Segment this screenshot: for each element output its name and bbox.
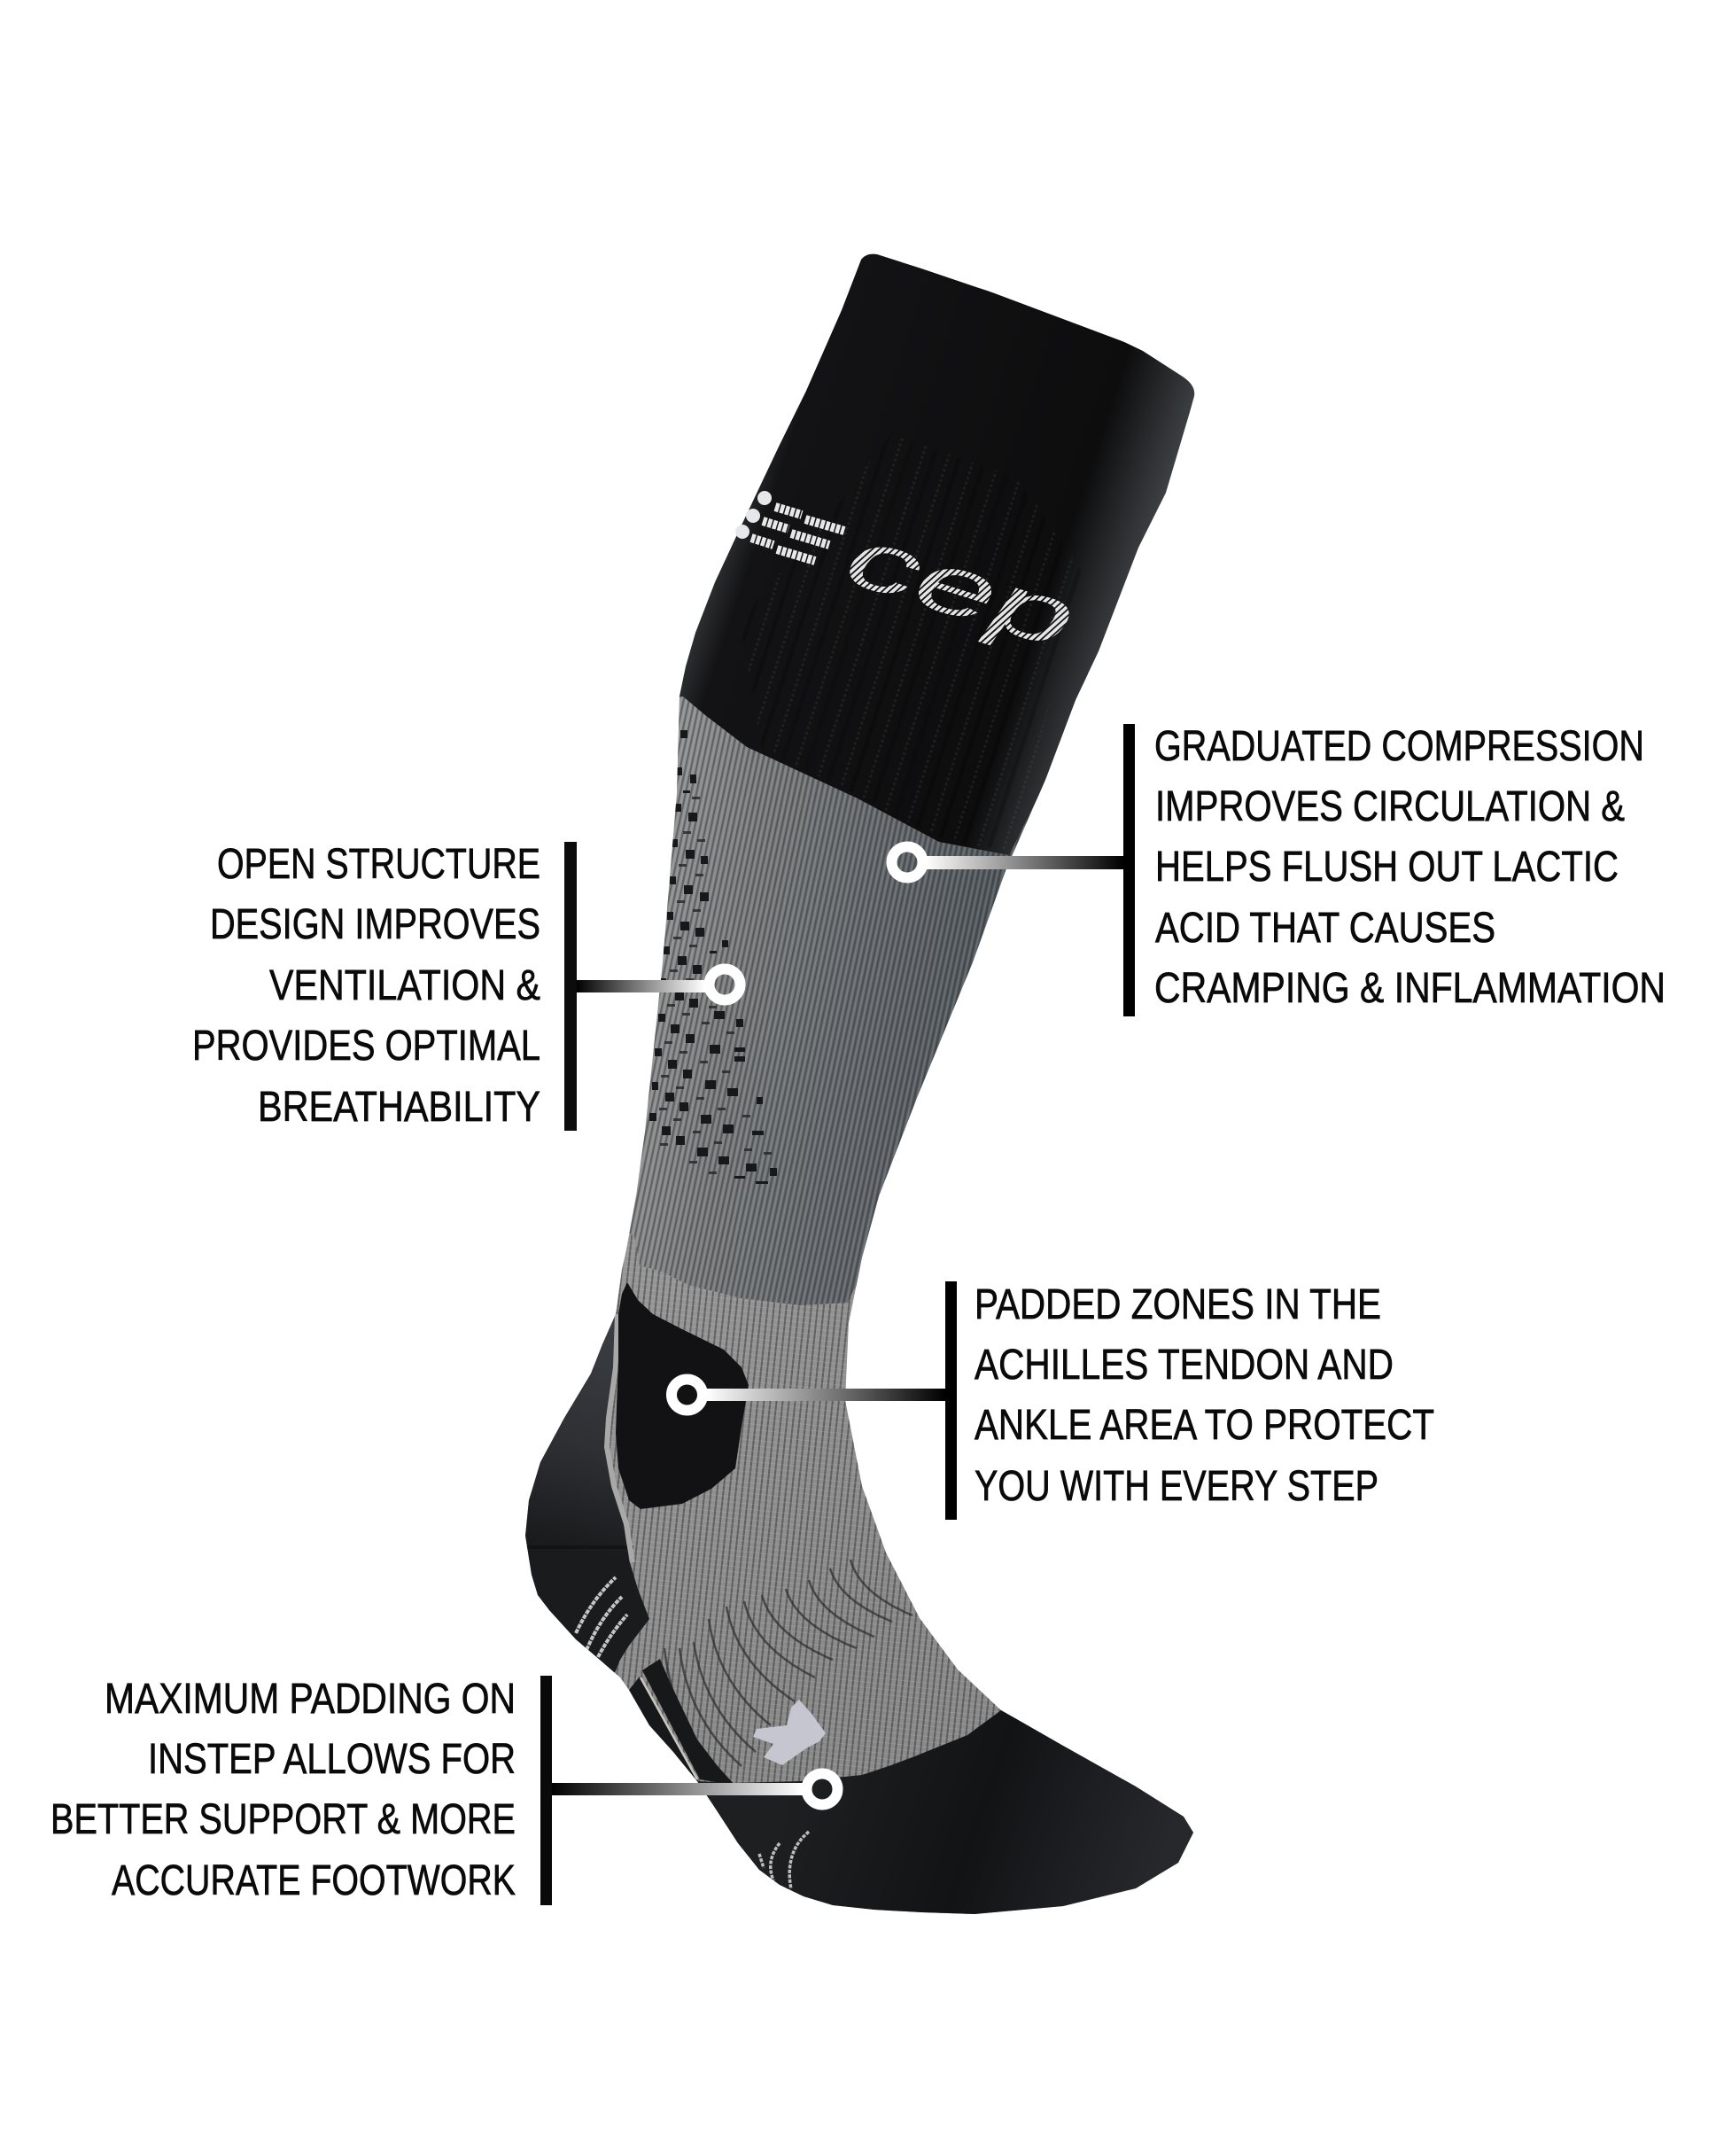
callout text xyxy=(192,841,540,1131)
foot logo mark xyxy=(753,1700,826,1765)
sock photo illustration xyxy=(496,239,1214,1941)
callout text: ACHILLES TENDON AND xyxy=(975,1342,1394,1389)
callout text: OPEN STRUCTURE xyxy=(217,841,540,888)
heel dark seam line xyxy=(523,1545,633,1549)
callout text: PADDED ZONES IN THE xyxy=(975,1281,1381,1328)
vertical bar xyxy=(1123,724,1135,1016)
callout text: ANKLE AREA TO PROTECT xyxy=(975,1402,1434,1449)
logo dots xyxy=(735,491,772,539)
ankle padded zone: black patch xyxy=(616,1282,749,1509)
callout text xyxy=(975,1281,1434,1510)
light grey knit texture xyxy=(505,1196,1214,1941)
side strip highlight xyxy=(641,1677,697,1779)
open structure mesh: small dashes xyxy=(659,797,772,1174)
callout text: YOU WITH EVERY STEP xyxy=(975,1463,1378,1510)
side strip inner xyxy=(642,1659,735,1786)
callout: padded zones xyxy=(672,1281,1434,1520)
connector line xyxy=(706,1389,945,1401)
calf panel: mid grey knit xyxy=(611,673,1090,1305)
callout text: IMPROVES CIRCULATION & xyxy=(1155,783,1625,830)
side strip outer xyxy=(629,1677,709,1798)
foot ribbing lines xyxy=(664,1560,912,1781)
heel: dark panel xyxy=(525,1312,649,1673)
vertical bar xyxy=(540,1676,552,1905)
toe stripes xyxy=(759,1832,809,1889)
callout text: PROVIDES OPTIMAL xyxy=(192,1023,540,1070)
vertical bar xyxy=(564,842,577,1131)
marker ring xyxy=(806,1774,838,1804)
callout: graduated compression xyxy=(891,723,1666,1016)
upper cuff: black band xyxy=(656,239,1205,855)
callout text: MAXIMUM PADDING ON xyxy=(105,1676,516,1723)
sock logo on cuff xyxy=(735,491,1103,663)
callout text: ACCURATE FOOTWORK xyxy=(112,1857,516,1904)
callout: maximum padding xyxy=(50,1676,838,1905)
connector line xyxy=(551,1783,803,1795)
callout text: VENTILATION & xyxy=(269,962,540,1009)
ankle seam highlight xyxy=(607,1314,633,1562)
marker ring xyxy=(709,969,741,1000)
open structure mesh: main dots xyxy=(649,730,777,1184)
vertical bar xyxy=(945,1281,957,1520)
callout text: INSTEP ALLOWS FOR xyxy=(148,1736,516,1783)
callout text: BREATHABILITY xyxy=(258,1084,540,1131)
callout text: BETTER SUPPORT & MORE xyxy=(50,1796,516,1843)
callout text xyxy=(1154,723,1666,1012)
callout text: HELPS FLUSH OUT LACTIC xyxy=(1155,844,1619,891)
marker ring xyxy=(891,847,923,877)
callout text: DESIGN IMPROVES xyxy=(210,901,540,948)
logo stripes xyxy=(751,507,844,561)
connector line xyxy=(577,980,706,992)
calf knit texture xyxy=(611,673,1090,1305)
foot and ankle: light grey knit xyxy=(505,1196,1214,1941)
cuff ribbing panel xyxy=(740,434,1085,851)
callout: open structure xyxy=(192,841,741,1131)
wordmark: cep xyxy=(824,512,1103,663)
callout text xyxy=(50,1676,516,1904)
connector line xyxy=(926,856,1123,869)
callout text: ACID THAT CAUSES xyxy=(1155,905,1495,952)
heel stripes xyxy=(576,1577,627,1657)
marker ring xyxy=(672,1379,703,1411)
toe: black panel xyxy=(673,1710,1193,1914)
